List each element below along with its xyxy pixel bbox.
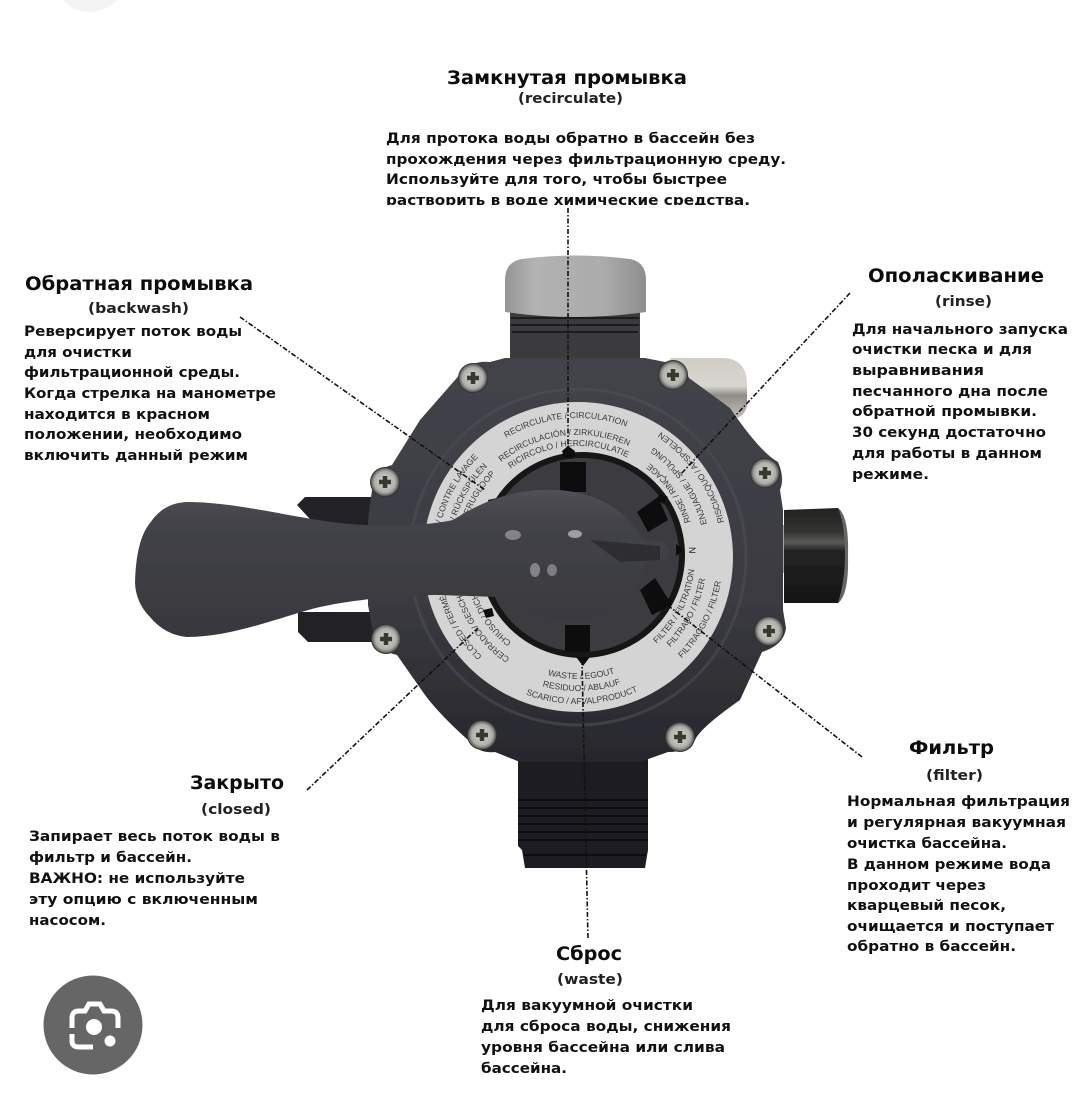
dial labels: RICIRCOLO / HERCIRCULATIE bbox=[508, 440, 630, 468]
heading: Замкнутая промывка bbox=[447, 67, 687, 89]
valve photo illustration bbox=[135, 256, 848, 868]
subheading: (closed) bbox=[201, 802, 271, 818]
description: Реверсирует поток воды bbox=[24, 324, 242, 340]
right pressure gauge bbox=[778, 508, 848, 603]
dial labels: CHIUSO / DICHT bbox=[471, 596, 510, 646]
subheading: (waste) bbox=[557, 972, 623, 988]
description bbox=[852, 322, 1068, 483]
description: положении, необходимо bbox=[24, 427, 242, 443]
description bbox=[847, 794, 1070, 955]
icon: image search camera button bbox=[44, 976, 142, 1074]
inner dial disc bbox=[479, 446, 685, 666]
description: находится в красном bbox=[24, 407, 210, 423]
dial labels: LAVADO / RÜCKSPÜLEN bbox=[450, 462, 487, 520]
description: очистки песка и для bbox=[852, 342, 1032, 358]
description: проходит через bbox=[847, 878, 986, 894]
dial labels bbox=[436, 412, 724, 704]
panel: filter bbox=[847, 737, 1070, 955]
description: очистка бассейна. bbox=[847, 836, 1007, 852]
description: растворить в воде химические средства. bbox=[386, 193, 750, 209]
description: кварцевый песок, bbox=[847, 898, 1006, 914]
description bbox=[24, 324, 276, 464]
panel: recirculate bbox=[386, 67, 786, 209]
description: обратной промывки. bbox=[852, 404, 1037, 420]
dial labels: RECIRCULACIÓN / ZIRKULIEREN bbox=[498, 429, 630, 462]
description: очищается и поступает bbox=[847, 919, 1055, 935]
dial ring bbox=[423, 402, 733, 712]
heading: Сброс bbox=[556, 943, 622, 965]
dial labels: RECIRCULATE / CIRCULATION bbox=[504, 412, 628, 438]
dial labels: CLOSED / FERMÉ bbox=[438, 595, 481, 659]
description: ВАЖНО: не используйте bbox=[29, 871, 245, 887]
dial labels: RESIDUO / ABLAUF bbox=[543, 678, 620, 692]
description: 30 секунд достаточно bbox=[852, 425, 1046, 441]
dial labels: BACKWASH / CONTRE LAVAGE bbox=[436, 454, 478, 522]
description bbox=[386, 131, 786, 209]
dial labels: WASTE / EGOUT bbox=[548, 668, 614, 680]
description: для сброса воды, снижения bbox=[481, 1019, 731, 1035]
dial labels: ENJUAGUE / SPÜLUNG bbox=[651, 448, 707, 525]
description: Для начального запуска bbox=[852, 322, 1068, 338]
leader lines bbox=[240, 208, 862, 940]
top port with grey cap bbox=[505, 256, 646, 365]
description: обратно в бассейн. bbox=[847, 939, 1016, 955]
bottom threaded port bbox=[518, 750, 648, 868]
description: прохождения через фильтрационную среду. bbox=[386, 152, 786, 168]
dial labels: SCARICO / AFVALPRODUCT bbox=[526, 686, 636, 704]
description bbox=[29, 829, 280, 929]
panel: backwash bbox=[24, 273, 276, 464]
description: насосом. bbox=[29, 913, 106, 929]
description: Используйте для того, чтобы быстрее bbox=[386, 172, 727, 188]
description: песчанного дна после bbox=[852, 384, 1048, 400]
subheading: (recirculate) bbox=[518, 91, 623, 107]
heading: Закрыто bbox=[190, 772, 284, 794]
valve body bbox=[368, 358, 786, 762]
subheading: (backwash) bbox=[88, 301, 189, 317]
description: для очистки bbox=[24, 345, 132, 361]
dial labels: RINSE / RINÇAGE bbox=[646, 463, 690, 524]
panel: waste bbox=[481, 943, 731, 1077]
description: В данном режиме вода bbox=[847, 857, 1051, 873]
panel: rinse bbox=[852, 265, 1068, 483]
faint circle at top edge bbox=[53, 0, 127, 12]
dial labels: RISCIACQUO / AFSPOELEN bbox=[658, 432, 724, 523]
dial labels: N bbox=[687, 547, 697, 554]
selector handle bbox=[135, 490, 669, 637]
description: и регулярная вакуумная bbox=[847, 815, 1066, 831]
description: Когда стрелка на манометре bbox=[24, 386, 276, 402]
dial labels: FILTRADO / FILTER bbox=[666, 578, 706, 647]
subheading: (rinse) bbox=[935, 294, 992, 310]
description: фильтрационной среды. bbox=[24, 365, 240, 381]
dial labels: CERRADO / GESCHLOSSEN bbox=[456, 596, 508, 662]
description: включить данный режим bbox=[24, 448, 248, 464]
description bbox=[481, 998, 731, 1077]
description: выравнивания bbox=[852, 363, 984, 379]
description: Для вакуумной очистки bbox=[481, 998, 693, 1014]
dial labels: LAVAGGIO / TERUGLOOP bbox=[462, 471, 493, 514]
left side ports bbox=[297, 497, 375, 642]
heading: Фильтр bbox=[909, 737, 994, 759]
description: бассейна. bbox=[481, 1061, 567, 1077]
subheading: (filter) bbox=[926, 768, 983, 784]
heading: Ополаскивание bbox=[868, 265, 1044, 287]
panel: closed bbox=[29, 772, 284, 929]
description: для работы в данном bbox=[852, 446, 1042, 462]
dial labels: FILTER / FILTRATION bbox=[653, 569, 694, 644]
description: Запирает весь поток воды в bbox=[29, 829, 280, 845]
description: фильтр и бассейн. bbox=[29, 850, 192, 866]
heading: Обратная промывка bbox=[25, 273, 253, 295]
description: уровня бассейна или слива bbox=[481, 1040, 725, 1056]
clear sight glass bbox=[670, 358, 747, 420]
description: Для протока воды обратно в бассейн без bbox=[386, 131, 755, 147]
description: режиме. bbox=[852, 467, 929, 483]
screws bbox=[370, 360, 784, 752]
description: Нормальная фильтрация bbox=[847, 794, 1070, 810]
dial labels: FILTRAGGIO / FILTER bbox=[678, 581, 721, 658]
description: эту опцию с включенным bbox=[29, 892, 258, 908]
body rim bbox=[410, 389, 746, 725]
